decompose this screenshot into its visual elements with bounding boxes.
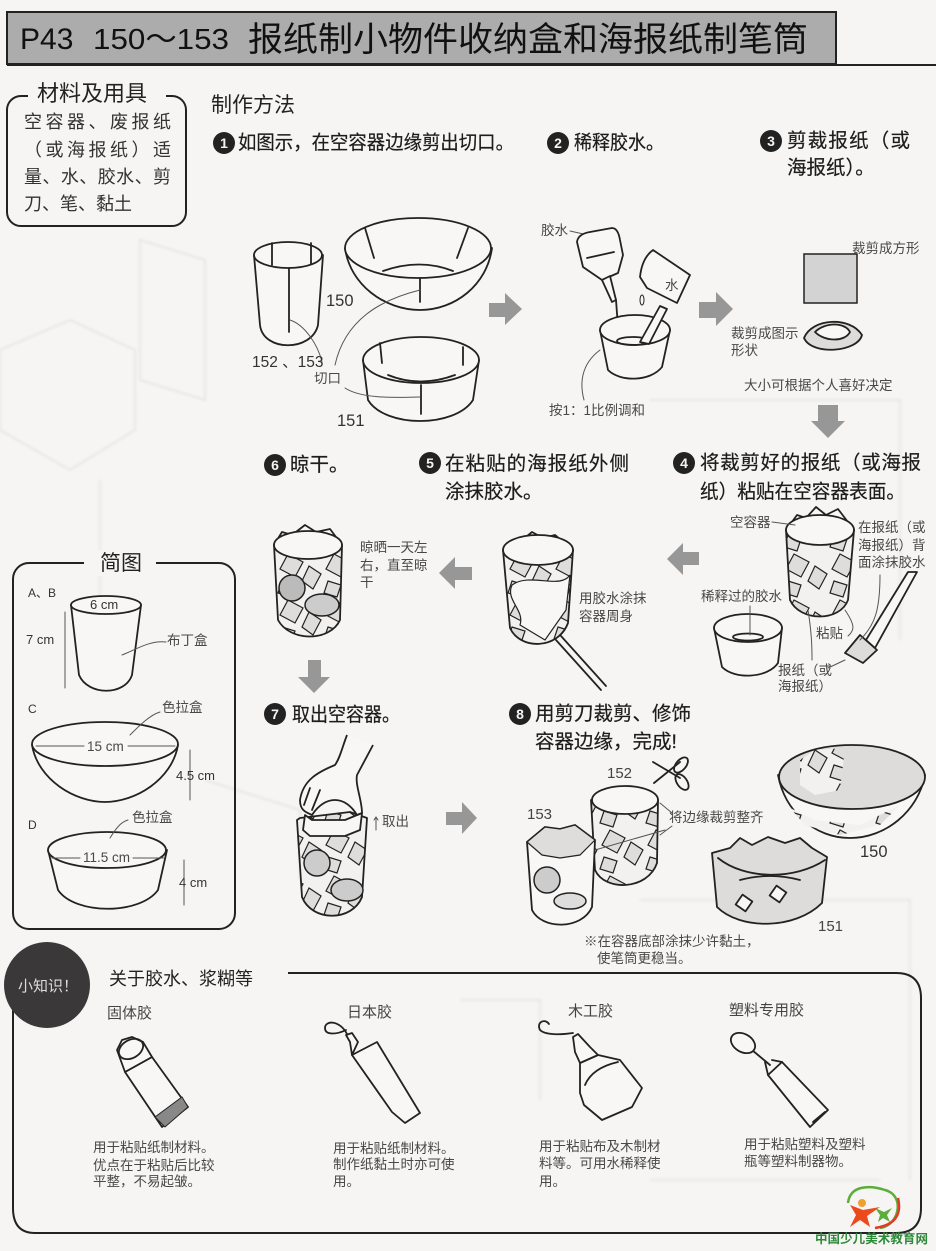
bowl C: 15 cm (87, 739, 124, 754)
panel: materials (7, 81, 186, 226)
step 3 heading: 海报纸）。 (787, 157, 875, 179)
wood glue: 用。 (539, 1174, 566, 1189)
illustration: step 5 (503, 532, 647, 690)
illustration: step 4: 稀释过的胶水 (701, 588, 782, 604)
arrow (298, 660, 330, 693)
illustration: step 4 (701, 507, 926, 694)
glue stick: 平整，不易起皱。 (93, 1174, 201, 1189)
illustration: step 8 finished pots: 150 (860, 843, 888, 861)
step 4 heading: 纸）粘贴在空容器表面。 (700, 481, 905, 503)
glue stick: 用于粘贴纸制材料。 (93, 1140, 214, 1155)
illustration: step 4: 粘贴 (816, 626, 843, 641)
step 7 heading: 7 (271, 706, 279, 722)
step 1 heading: 1 (220, 135, 228, 151)
Japanese glue: 制作纸黏土时亦可使 (333, 1156, 455, 1172)
step 3 heading: 3 (767, 133, 775, 149)
wood glue (539, 1003, 661, 1189)
illustration: step 4: 海报纸） (778, 679, 832, 694)
step 4 heading: 将裁剪好的报纸（或海报 (700, 452, 921, 474)
step 7 heading: 取出空容器。 (292, 704, 400, 726)
bowl C: 色拉盒 (162, 699, 203, 715)
cup A B: A、B (28, 586, 56, 600)
illustration: step 8 finished pots: 151 (818, 918, 843, 935)
step 2 heading: 稀释胶水。 (574, 132, 664, 154)
illustration: step 5: 容器周身 (579, 608, 633, 624)
panel: materials: 空容器、废报纸 (24, 112, 171, 132)
bowl D: 4 cm (179, 875, 207, 890)
illustration: step 4: 海报纸）背 (858, 538, 926, 553)
illustration: step 3 cut paper: 大小可根据个人喜好决定 (744, 378, 892, 393)
title bar (7, 12, 936, 65)
step 8 heading: 8 (516, 706, 524, 722)
Japanese glue: 用于粘贴纸制材料。 (333, 1141, 454, 1156)
title bar: 报纸制小物件收纳盒和海报纸制笔筒 (248, 21, 808, 59)
logo (815, 1187, 928, 1246)
illustration: step 1 containers: 151 (337, 412, 365, 430)
illustration: step 2 dilute glue: 水 (665, 278, 679, 293)
panel: sketch: 简图 (100, 552, 142, 575)
step 6 heading: 晾干。 (290, 454, 349, 476)
illustration: step 2 dilute glue: 按1：1比例调和 (549, 403, 645, 418)
cup A B: 7 cm (26, 632, 54, 647)
illustration: step 8 finished pots: 将边缘裁剪整齐 (669, 810, 764, 825)
plastic glue: 塑料专用胶 (729, 1002, 804, 1019)
illustration: step 8 finished pots: ※在容器底部涂抹少许黏土， (584, 933, 760, 949)
illustration: step 4: 面涂抹胶水 (858, 554, 926, 570)
tips badge (4, 942, 90, 1028)
illustration: step 8 finished pots: 152 (607, 765, 632, 782)
panel: tips (4, 942, 921, 1233)
illustration: step 1 containers: 切口 (314, 371, 341, 386)
illustration: step 1 containers: 152 、153 (252, 354, 324, 371)
tips badge: 小知识！ (18, 978, 78, 995)
illustration: step 7 (297, 735, 409, 916)
step 1 heading: 如图示，在空容器边缘剪出切口。 (238, 132, 514, 154)
Japanese glue (325, 1004, 455, 1189)
step 8 heading (509, 703, 691, 753)
illustration: step 6 (274, 525, 428, 636)
glue stick (93, 1005, 215, 1189)
wood glue: 木工胶 (568, 1003, 613, 1020)
plastic glue: 瓶等塑料制器物。 (744, 1153, 852, 1169)
illustration: step 6: 干 (360, 575, 374, 590)
icon: scissors (653, 755, 691, 792)
arrow (439, 557, 472, 589)
illustration: step 5: 用胶水涂抹 (579, 590, 647, 606)
wood glue: 料等。可用水稀释使 (539, 1155, 661, 1171)
illustration: step 3 cut paper: 裁剪成图示 (731, 326, 798, 341)
step 5 heading: 涂抹胶水。 (445, 481, 543, 503)
title bar: 150～153 (93, 24, 229, 56)
arrow (667, 543, 699, 575)
illustration: step 4: 空容器 (730, 514, 771, 530)
illustration: step 4: 在报纸（或 (858, 520, 926, 535)
arrow (699, 292, 733, 326)
bowl D: 色拉盒 (132, 809, 173, 825)
wood glue: 用于粘贴布及木制材 (539, 1139, 660, 1154)
illustration: step 3 cut paper: 形状 (731, 343, 758, 358)
illustration: step 7: 取出 (382, 814, 409, 829)
title bar: P43 (20, 23, 73, 56)
cup A B (26, 586, 208, 691)
bowl C: C (28, 702, 37, 716)
illustration: step 3 cut paper (731, 241, 920, 393)
bowl C (28, 699, 215, 802)
illustration: step 8 finished pots (527, 745, 925, 966)
arrow (811, 405, 845, 438)
step 3 heading (760, 130, 910, 179)
panel: materials: 量、水、胶水、剪 (24, 167, 171, 187)
bowl D: D (28, 818, 37, 832)
arrow (446, 802, 477, 834)
panel: sketch (13, 550, 235, 929)
plastic glue (727, 1002, 866, 1169)
arrow (489, 293, 522, 325)
bowl D (28, 809, 207, 909)
illustration: step 3 cut paper: 裁剪成方形 (852, 241, 920, 256)
tips heading: 关于胶水、浆糊等 (109, 969, 253, 989)
illustration: step 2 dilute glue (541, 222, 690, 418)
step 5 heading: 5 (426, 455, 434, 471)
step 5 heading: 在粘贴的海报纸外侧 (445, 453, 629, 475)
illustration: step 8 finished pots: 使笔筒更稳当。 (597, 950, 692, 966)
cup A B: 布丁盒 (167, 632, 208, 648)
illustration: step 4: 报纸（或 (778, 663, 832, 678)
illustration: step 1 containers (252, 218, 492, 430)
bowl D: 11.5 cm (83, 850, 130, 865)
illustration: step 1 containers: 150 (326, 292, 354, 310)
step 6 heading: 6 (271, 457, 279, 473)
plastic glue: 用于粘贴塑料及塑料 (744, 1137, 866, 1152)
panel: materials: （或海报纸）适 (24, 140, 171, 160)
logo: 中国少儿美术教育网 (815, 1231, 928, 1246)
glue stick: 固体胶 (107, 1005, 152, 1022)
step 2 heading: 2 (554, 135, 562, 151)
step 3 heading: 剪裁报纸（或 (787, 130, 910, 152)
panel: materials: 材料及用具 (37, 81, 147, 106)
step 6 heading (264, 454, 349, 476)
bowl C: 4.5 cm (176, 768, 215, 783)
panel: materials: 刀、笔、黏土 (24, 194, 132, 214)
illustration: step 2 dilute glue: 胶水 (541, 222, 568, 238)
Japanese glue: 日本胶 (347, 1004, 392, 1021)
illustration: step 8 finished pots: 153 (527, 806, 552, 823)
step 8 heading: 容器边缘，完成! (535, 731, 677, 753)
cup A B: 6 cm (90, 597, 118, 612)
step 8 heading: 用剪刀裁剪、修饰 (535, 703, 691, 725)
step 4 heading: 4 (680, 455, 688, 471)
heading: method: 制作方法 (211, 94, 295, 117)
step 5 heading (419, 452, 629, 503)
glue stick: 优点在于粘贴后比较 (93, 1158, 215, 1173)
illustration: step 6: 晾晒一天左 (360, 540, 428, 555)
illustration: step 6: 右，直至晾 (360, 558, 428, 573)
step 4 heading (673, 452, 921, 503)
Japanese glue: 用。 (333, 1174, 360, 1189)
